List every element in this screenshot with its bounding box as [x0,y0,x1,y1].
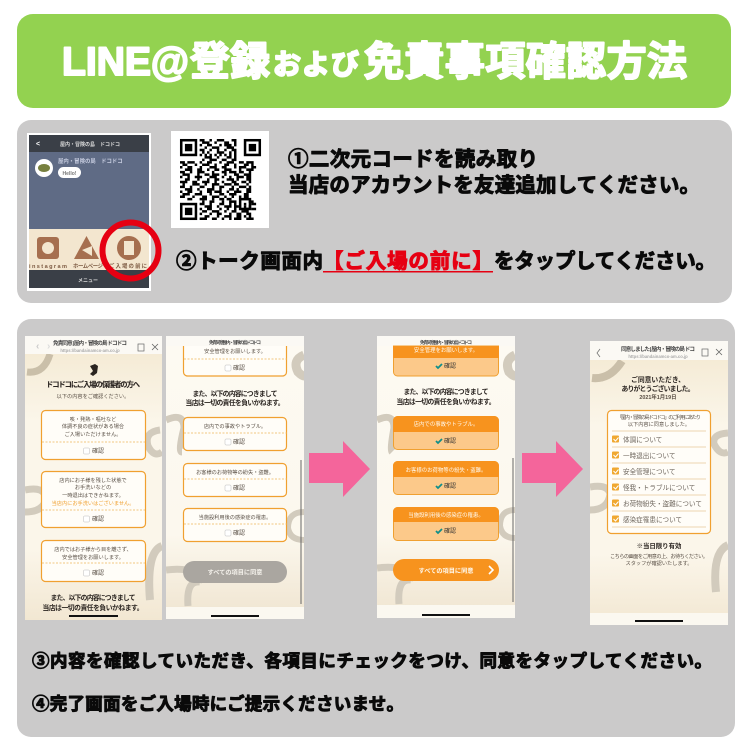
arrow: second [522,441,583,497]
title banner [17,14,731,108]
phone screen 4: completion [590,341,728,625]
screenshot: LINE talk screen: 屋内・冒険の島 ドコドコ [58,157,123,165]
step 4 text: ④完了画面をご入場時にご提示くださいませ。 [32,694,404,714]
phone screen 4: completion: 2021年1月19日 [639,393,677,401]
card: accidents: 店内での事故やトラブル。 [204,422,266,430]
screenshot: LINE talk screen: < [36,141,40,148]
card: supervision: 確認 [92,569,104,577]
title banner: 登録 [190,40,270,84]
button: agree disabled [183,561,287,583]
phone screen 3: checked list: 免責同意 | 屋内・冒険の島 ドコドコ [420,339,472,346]
card: agreed items: 感染症罹患について [623,515,682,524]
screenshot: LINE talk screen: instagram [29,264,67,270]
title banner: 免責事項確認方法 [364,40,687,84]
card: temporary exit: 確認 [92,515,104,523]
card: infection [184,508,287,542]
phone screen 1: guardian notice: ドコドコにご入場の保護者の方へ [46,380,141,389]
card: supervision, checked [393,346,499,376]
phone screen 4: completion: スタッフが確認いたします。 [626,559,692,567]
step 2 text: ②トーク画面内 [176,250,323,273]
card: agreed items: 一時退出について [623,451,676,460]
card: belongings, checked: 確認 [444,482,456,490]
phone screen 4: completion: ありがとうございました。 [622,384,694,393]
panel: consent procedure [17,319,735,737]
screenshot: LINE talk screen: ご入場の前に [109,262,147,270]
card: belongings [184,464,287,496]
card: accidents, checked: 店内での事故やトラブル。 [414,420,478,428]
phone screen 1: guardian notice: https://bandainamco-am.co.jp [60,348,120,353]
card: accidents, checked [393,416,499,450]
card: supervision: 店内ではお子様から目を離さず、 [54,545,132,553]
phone screen 3: checked list: 当店は一切の責任を負いかねます。 [396,397,496,406]
card: agreed items: 安全管理について [623,467,676,476]
card: supervision, scrolled [184,346,287,376]
step 2 text: 【ご入場の前に】 [323,249,493,273]
phone screen 1: guardian notice: 以下の内容をご確認ください。 [57,392,129,400]
screenshot: LINE talk screen: ホームページ [73,263,104,270]
card: agreed items: 怪我・トラブルについて [623,483,695,492]
card: condition: 体調不良の症状がある場合 [62,422,125,430]
step 1 text: ①二次元コードを読み取り [288,148,538,171]
phone screen 4: completion: https://bandainamco-am.co.jp [628,354,688,359]
card: condition [42,410,146,460]
step 2 text [176,249,716,273]
phone screen 2: unchecked list: 免責同意 | 屋内・冒険の島 ドコドコ [209,339,261,346]
phone screen 2: unchecked list [166,336,304,619]
phone screen 1: guardian notice: 当店は一切の責任を負いかねます。 [42,603,144,612]
card: temporary exit: 店内にお子様を残した状態で [59,476,127,484]
card: condition: 確認 [92,447,104,455]
phone screen 4: completion: こちらの画面をご用意の上、お待ちください。 [610,552,708,560]
card: agreed items [608,410,710,534]
card: supervision, scrolled: 確認 [233,364,245,372]
phone screen 2: unchecked list: また、以下の内容につきまして [192,389,278,398]
card: supervision, scrolled: 安全管理をお願いします。 [204,347,266,355]
button: agree disabled: すべての項目に同意 [207,568,263,576]
card: accidents [184,418,287,450]
screenshot: LINE talk screen: 屋内・冒険の島 ドコドコ [60,141,120,148]
card: belongings, checked: お客様のお荷物等の紛失・盗難。 [406,466,486,474]
button: agree enabled [393,559,499,581]
arrow: first [309,441,370,497]
card: belongings, checked [393,461,499,494]
screenshot: LINE talk screen: メニュー [78,278,98,284]
phone screen 3: checked list [377,336,515,618]
phone screen 4: completion: 同意しました | 屋内・冒険の島 ドコ [621,345,695,353]
card: accidents: 確認 [233,438,245,446]
icon: red highlight circle [102,222,158,278]
card: temporary exit [42,472,146,528]
step 1 text [288,148,700,197]
title banner: および [273,49,359,80]
step 1 text: 当店のアカウントを友達追加してください。 [288,174,700,197]
card: temporary exit: 一時退出はできかねます。 [62,491,124,499]
phone screen 1: guardian notice [25,336,162,620]
card: condition: 咳・発熱・嘔吐など [70,415,117,423]
card: belongings: 確認 [233,484,245,492]
card: supervision, checked: 確認 [444,362,456,370]
title banner: LINE@ [62,40,189,84]
card: temporary exit: 当店内にお手洗いはございません。 [52,499,134,507]
card: supervision: 安全管理をお願いします。 [62,553,124,561]
phone screen 1: guardian notice: 免責同意 | 屋内・冒険の島 ドコドコ [53,339,127,347]
step 2 text: をタップしてください。 [494,250,716,273]
card: accidents, checked: 確認 [444,437,456,445]
card: supervision, checked: 安全管理をお願いします。 [414,346,478,354]
card: infection, checked [393,507,499,540]
phone screen 4: completion: ご同意いただき、 [631,375,685,384]
card: agreed items: 体調について [623,435,662,444]
card: infection, checked: 確認 [444,527,456,535]
phone screen 4: completion: ※当日限り有効 [637,541,682,550]
card: agreed items: お荷物紛失・盗難について [623,499,702,508]
card: supervision [42,540,146,582]
card: infection: 当施設利用後の感染症の罹患。 [199,513,271,521]
QR code [171,131,269,228]
button: agree enabled: すべての項目に同意 [418,567,474,575]
phone screen 2: unchecked list: 当店は一切の責任を負いかねます。 [186,398,284,407]
phone screen 1: guardian notice: ‹ [36,341,39,352]
card: infection, checked: 当施設利用後の感染症の罹患。 [408,511,484,519]
card: condition: ご入場いただけません。 [65,430,121,438]
card: temporary exit: お手洗いなどの [75,483,111,491]
phone screen 1: guardian notice: また、以下の内容につきまして [50,593,136,602]
card: belongings: お客様のお荷物等の紛失・盗難。 [196,468,274,476]
screenshot: LINE talk screen [27,133,151,291]
panel: LINE registration steps [17,120,732,303]
card: agreed items: 「屋内・冒険の島 ドコドコ」のご利用にあたり [617,413,701,421]
phone screen 3: checked list: また、以下の内容につきまして [404,387,488,396]
card: infection: 確認 [233,529,245,537]
card: agreed items: 以下内容に同意しました。 [628,420,690,428]
step 3 text: ③内容を確認していただき、各項目にチェックをつけ、同意をタップしてください。 [32,651,712,671]
phone screen 1: guardian notice: › [47,341,50,352]
screenshot: LINE talk screen: Hello! [63,171,77,177]
